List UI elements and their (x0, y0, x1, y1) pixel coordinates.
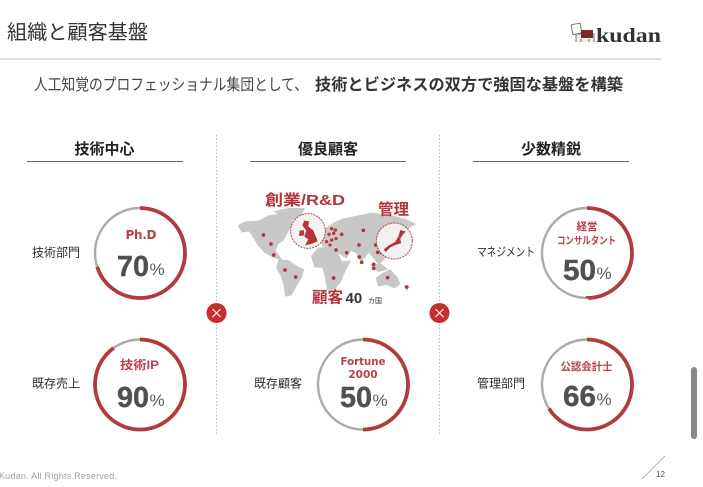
map label: 創業/R&D: 創業/R&D (265, 191, 345, 209)
donut: Ph.D 70%: % (150, 260, 165, 279)
donut: 経営コンサルタント 50%: 50 (563, 255, 596, 287)
label: マネジメント: マネジメント (477, 245, 535, 259)
donut: 公認会計士 66%: % (596, 390, 612, 409)
label: 技術部門: 技術部門 (32, 244, 80, 260)
donut: 経営コンサルタント 50%: コンサルタント (557, 235, 616, 247)
donut: Fortune 2000 50%: 50 (340, 382, 372, 414)
donut: Fortune 2000 50% (318, 340, 408, 430)
label: 既存売上: 既存売上 (32, 376, 80, 390)
heading: 少数精鋭: 少数精鋭 (521, 140, 581, 158)
footer copyright: Kudan. All Rights Reserved. (0, 471, 117, 481)
label: 管理部門: 管理部門 (477, 376, 525, 390)
donut: 経営コンサルタント 50% (542, 208, 632, 298)
donut: Ph.D 70%: Ph.D (126, 228, 157, 242)
map label: 管理: 管理 (378, 200, 410, 218)
donut: 経営コンサルタント 50%: % (596, 264, 612, 283)
donut: 経営コンサルタント 50%: 経営 (576, 220, 598, 233)
donut: Ph.D 70% (95, 208, 185, 298)
donut: Ph.D 70%: 70 (117, 251, 149, 283)
donut: 公認会計士 66%: 公認会計士 (560, 360, 613, 373)
donut: Fortune 2000 50%: % (372, 391, 388, 410)
donut: 技術IP 90% (95, 340, 185, 430)
subtitle: 技術とビジネスの双方で強固な基盤を構築 (315, 75, 623, 94)
donut: 公認会計士 66% (542, 340, 632, 430)
donut: 技術IP 90%: % (150, 391, 165, 410)
title: 組織と顧客基盤 (7, 21, 148, 44)
donut: 技術IP 90%: 90 (117, 382, 149, 414)
logo: kudan (571, 23, 661, 47)
map label: 顧客40カ国: カ国 (368, 297, 382, 305)
world map (238, 208, 416, 297)
map label: 顧客40カ国 (312, 288, 382, 307)
page number (642, 456, 665, 479)
map label: 顧客40カ国: 40 (346, 290, 362, 307)
donut: 公認会計士 66%: 66 (563, 381, 596, 413)
donut: Fortune 2000 50%: Fortune (340, 356, 386, 368)
donut: Fortune 2000 50%: 2000 (348, 369, 378, 381)
logo: kudan: kudan (596, 25, 661, 47)
scrollbar (691, 367, 697, 439)
heading: 技術中心: 技術中心 (74, 140, 135, 158)
icon: multiply right (430, 303, 450, 323)
subtitle: 人工知覚のプロフェッショナル集団として、 (34, 76, 308, 94)
label: 既存顧客: 既存顧客 (254, 376, 302, 390)
donut: 技術IP 90%: 技術IP (120, 357, 159, 372)
map label: 顧客40カ国: 顧客 (312, 288, 344, 306)
heading: 優良顧客: 優良顧客 (298, 140, 358, 158)
icon: multiply left (206, 303, 226, 323)
page number: 12 (656, 470, 665, 479)
